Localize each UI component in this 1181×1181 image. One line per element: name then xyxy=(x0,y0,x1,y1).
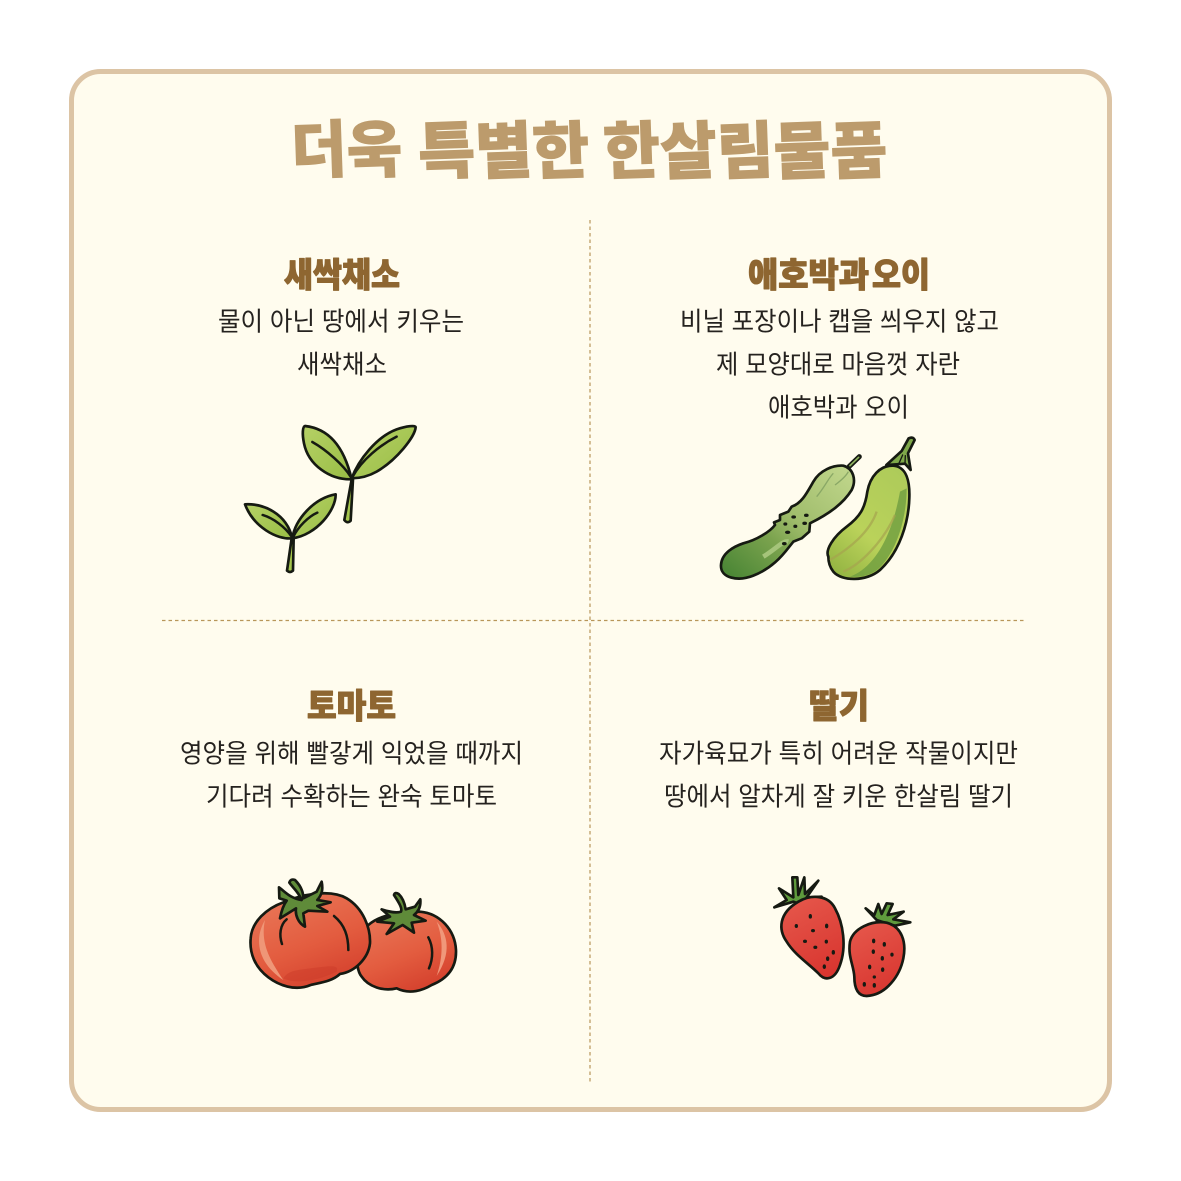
heading: sprout vegetables: 새싹채소 xyxy=(284,257,400,295)
text block: zucchini and cucumber description: 제 모양대로 마음껏 자란 xyxy=(716,350,960,380)
title: 한살림물품 xyxy=(602,117,888,188)
heading: zucchini and cucumber: 오이 xyxy=(872,257,930,295)
text block: strawberry description xyxy=(659,738,1018,812)
card panel xyxy=(72,72,1110,1110)
icon: cucumber and zucchini xyxy=(721,438,915,579)
panel: tomato xyxy=(180,688,523,992)
title: 더욱 xyxy=(290,116,403,187)
text block: zucchini and cucumber description: 비닐 포장이나 캡을 씌우지 않고 xyxy=(680,306,999,336)
text block: strawberry description: 자가육묘가 특히 어려운 작물이지만 xyxy=(659,738,1018,768)
icon: sprouts xyxy=(245,426,416,572)
text block: tomato description xyxy=(180,738,523,812)
heading: strawberry: 딸기 xyxy=(809,688,869,726)
text block: zucchini and cucumber description: 애호박과 오이 xyxy=(768,392,909,422)
icon: strawberries xyxy=(774,877,910,996)
text block: zucchini and cucumber description xyxy=(680,306,999,422)
heading: zucchini and cucumber: 애호박과 xyxy=(748,257,869,295)
panel: zucchini and cucumber xyxy=(680,257,999,579)
icon: tomatoes xyxy=(250,880,456,992)
text block: sprout vegetables description: 새싹채소 xyxy=(297,350,387,380)
panel: strawberry xyxy=(659,688,1018,996)
heading: zucchini and cucumber xyxy=(748,257,930,295)
text block: sprout vegetables description: 물이 아닌 땅에서 키우는 xyxy=(218,306,464,336)
panel: sprout vegetables xyxy=(218,257,464,572)
text block: tomato description: 기다려 수확하는 완숙 토마토 xyxy=(206,782,497,812)
text block: strawberry description: 땅에서 알차게 잘 키운 한살림 딸기 xyxy=(664,782,1013,812)
title: 특별한 xyxy=(417,117,590,188)
title xyxy=(290,116,888,188)
text block: tomato description: 영양을 위해 빨갛게 익었을 때까지 xyxy=(180,738,523,768)
text block: sprout vegetables description xyxy=(218,306,464,380)
heading: tomato: 토마토 xyxy=(307,688,396,726)
